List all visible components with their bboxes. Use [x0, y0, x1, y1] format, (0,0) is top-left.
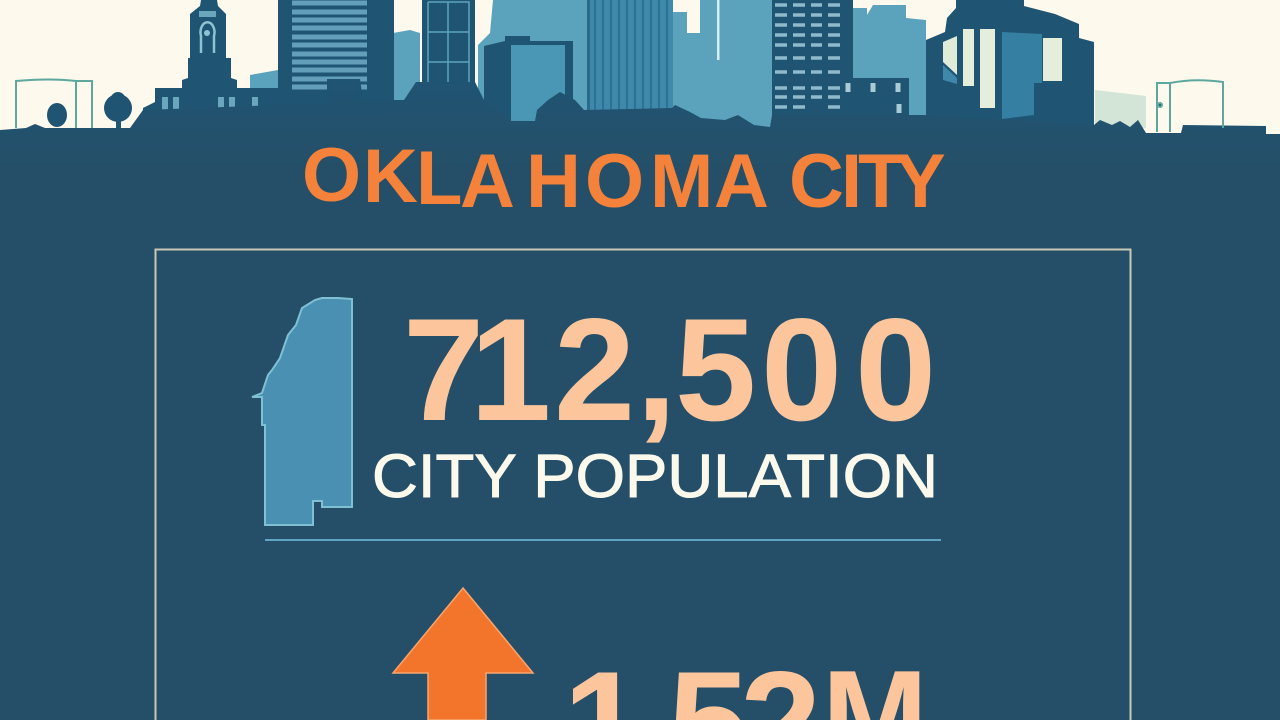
windowed tower: [772, 0, 853, 125]
back buildings: [250, 0, 1146, 128]
dark tower with stripes: [278, 0, 394, 115]
low hall: [143, 88, 278, 125]
lattice tower: [422, 0, 475, 95]
low block: [845, 78, 909, 123]
clock tower: [182, 0, 237, 110]
metro value: [573, 671, 920, 720]
population value: 712,500: [403, 288, 936, 451]
tree left: [47, 92, 132, 128]
domed building: [926, 0, 1094, 125]
divider: [265, 539, 941, 541]
ground silhouette: [0, 79, 1280, 170]
title: OKLAHOMA CITY: [302, 133, 946, 224]
population label: CITY POPULATION: [372, 442, 938, 510]
icon: up arrow: [393, 588, 533, 720]
panel frame: [156, 250, 1130, 720]
left lamp frame: [16, 80, 92, 128]
right lamp frame: [1157, 80, 1223, 132]
block with window: [484, 36, 573, 122]
icon: city map outline: [252, 298, 352, 525]
skyline illustration: [0, 0, 1280, 170]
striped tower: [587, 0, 673, 112]
